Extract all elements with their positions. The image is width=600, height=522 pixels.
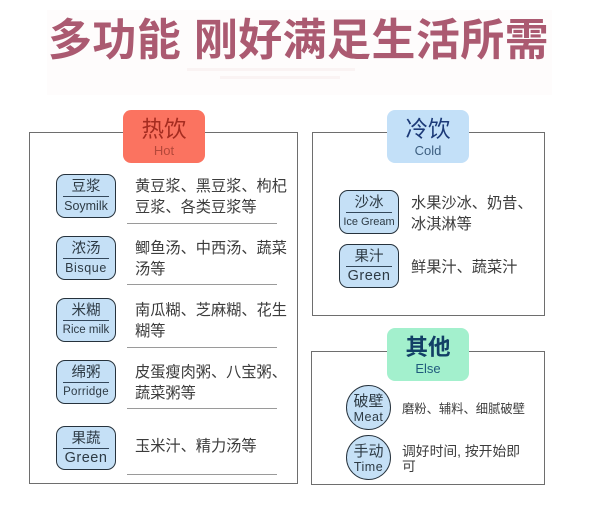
- item: wall breaking description: 磨粉、辅料、细腻破壁: [402, 402, 525, 416]
- item: juice description: 鲜果汁、蔬菜汁: [411, 259, 517, 276]
- item: porridge label: 绵粥: [72, 365, 100, 381]
- item: rice milk description: [135, 302, 287, 340]
- heading tag: hot: Hot: [154, 143, 174, 158]
- item: porridge description: [135, 364, 287, 402]
- item: manual label: 手动: [353, 443, 384, 460]
- item: juice label: 果汁: [354, 249, 384, 265]
- item: rice milk label: Rice milk: [63, 324, 109, 336]
- heading tag: other: [387, 328, 469, 381]
- item: manual label: Time: [354, 460, 383, 474]
- item: wall breaking label: [346, 385, 391, 430]
- item: ice cream label: Ice Gream: [343, 216, 395, 228]
- item: manual description: 可: [402, 459, 416, 474]
- item: porridge description: 皮蛋瘦肉粥、八宝粥、: [135, 364, 287, 381]
- item: bisque label: 浓汤: [72, 241, 100, 257]
- item: ice cream label: 沙冰: [354, 195, 384, 211]
- item: juice label: [339, 244, 399, 288]
- item: fruit and vegetable label: [56, 426, 116, 470]
- item: ice cream description: 水果沙冰、奶昔、: [411, 195, 532, 212]
- item: bisque description: [135, 240, 287, 278]
- panel: other: [311, 351, 545, 485]
- faint subtitle line two: [220, 76, 340, 79]
- heading tag: cold: [387, 110, 469, 163]
- item: soymilk label: Soymilk: [64, 199, 108, 213]
- title: 多功能 刚好满足生活所需: [48, 16, 549, 65]
- item: porridge label: [56, 360, 116, 404]
- item: ice cream description: [411, 194, 532, 233]
- heading tag: other: Else: [415, 361, 441, 376]
- item: rice milk description: 南瓜糊、芝麻糊、花生: [135, 302, 287, 319]
- item: rice milk label: [56, 298, 116, 342]
- item: bisque label: [56, 236, 116, 280]
- item: ice cream description: 冰淇淋等: [411, 216, 472, 233]
- item: porridge description: 蔬菜粥等: [135, 385, 196, 402]
- item: manual description: [402, 444, 520, 474]
- heading tag: other: 其他: [405, 335, 450, 360]
- panel: hot drinks: [29, 132, 298, 484]
- item: wall breaking label: 破壁: [353, 393, 384, 410]
- item: rice milk description: 糊等: [135, 323, 165, 340]
- item: bisque label: Bisque: [65, 261, 107, 275]
- item: fruit and vegetable label: 果蔬: [72, 431, 100, 447]
- item: rice milk label: 米糊: [72, 303, 100, 319]
- item: fruit and vegetable label: Green: [65, 450, 107, 466]
- panel: cold drinks: [312, 132, 545, 316]
- heading tag: cold: Cold: [415, 143, 441, 158]
- item: fruit and vegetable description: 玉米汁、精力汤等: [135, 438, 256, 455]
- item: soymilk description: [135, 178, 287, 216]
- item: bisque description: 汤等: [135, 261, 165, 278]
- faint subtitle line one: [187, 68, 355, 71]
- heading tag: cold: 冷饮: [405, 117, 450, 142]
- heading tag: hot: 热饮: [141, 117, 186, 142]
- item: soymilk label: 豆浆: [72, 179, 100, 195]
- item: juice label: Green: [348, 268, 390, 284]
- title background: [47, 10, 552, 95]
- heading tag: hot: [123, 110, 205, 163]
- item: soymilk description: 豆浆、各类豆浆等: [135, 199, 256, 216]
- item: manual label: [346, 435, 391, 480]
- item: bisque description: 鲫鱼汤、中西汤、蔬菜: [135, 240, 287, 257]
- item: manual description: 调好时间, 按开始即: [402, 444, 520, 459]
- item: porridge label: Porridge: [63, 386, 109, 398]
- item: ice cream label: [339, 190, 399, 234]
- item: soymilk description: 黄豆浆、黑豆浆、枸杞: [135, 178, 287, 195]
- item: wall breaking label: Meat: [354, 410, 383, 424]
- item: soymilk label: [56, 174, 116, 218]
